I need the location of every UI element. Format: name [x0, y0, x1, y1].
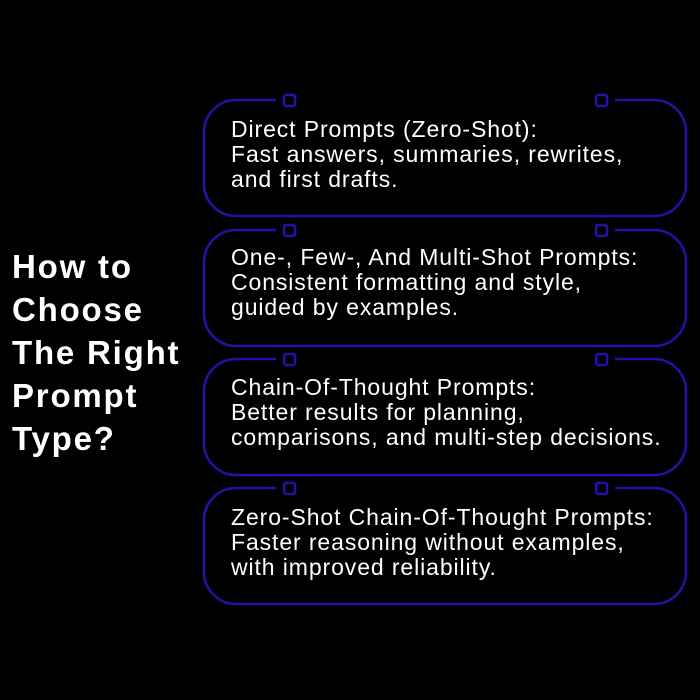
- text: few-shot prompts: Consistent formatting and style,: [231, 269, 582, 295]
- frame 1: [204, 95, 686, 216]
- title: [12, 248, 180, 457]
- text: chain-of-thought: Chain-Of-Thought Prompts:: [231, 374, 536, 400]
- text: chain-of-thought: comparisons, and multi-step decisions.: [231, 424, 662, 450]
- title: The Right: [12, 334, 180, 371]
- frame 3: [204, 354, 686, 475]
- text: direct prompts: Fast answers, summaries, rewrites,: [231, 141, 623, 167]
- text: direct prompts: and first drafts.: [231, 166, 398, 192]
- frame 2: [204, 225, 686, 346]
- title: How to: [12, 248, 133, 285]
- text: chain-of-thought: [231, 374, 662, 450]
- frame 4: [204, 483, 686, 604]
- text: zero-shot CoT: Zero-Shot Chain-Of-Thought Prompts:: [231, 504, 654, 530]
- text: zero-shot CoT: Faster reasoning without examples,: [231, 529, 625, 555]
- text: few-shot prompts: One-, Few-, And Multi-Shot Prompts:: [231, 244, 638, 270]
- title: Prompt: [12, 377, 138, 414]
- text: few-shot prompts: [231, 244, 638, 320]
- text: zero-shot CoT: [231, 504, 654, 580]
- text: zero-shot CoT: with improved reliability.: [231, 554, 497, 580]
- text: few-shot prompts: guided by examples.: [231, 294, 459, 320]
- title: Type?: [12, 420, 116, 457]
- text: direct prompts: [231, 116, 623, 192]
- text: chain-of-thought: Better results for planning,: [231, 399, 525, 425]
- title: Choose: [12, 291, 144, 328]
- text: direct prompts: Direct Prompts (Zero-Shot):: [231, 116, 538, 142]
